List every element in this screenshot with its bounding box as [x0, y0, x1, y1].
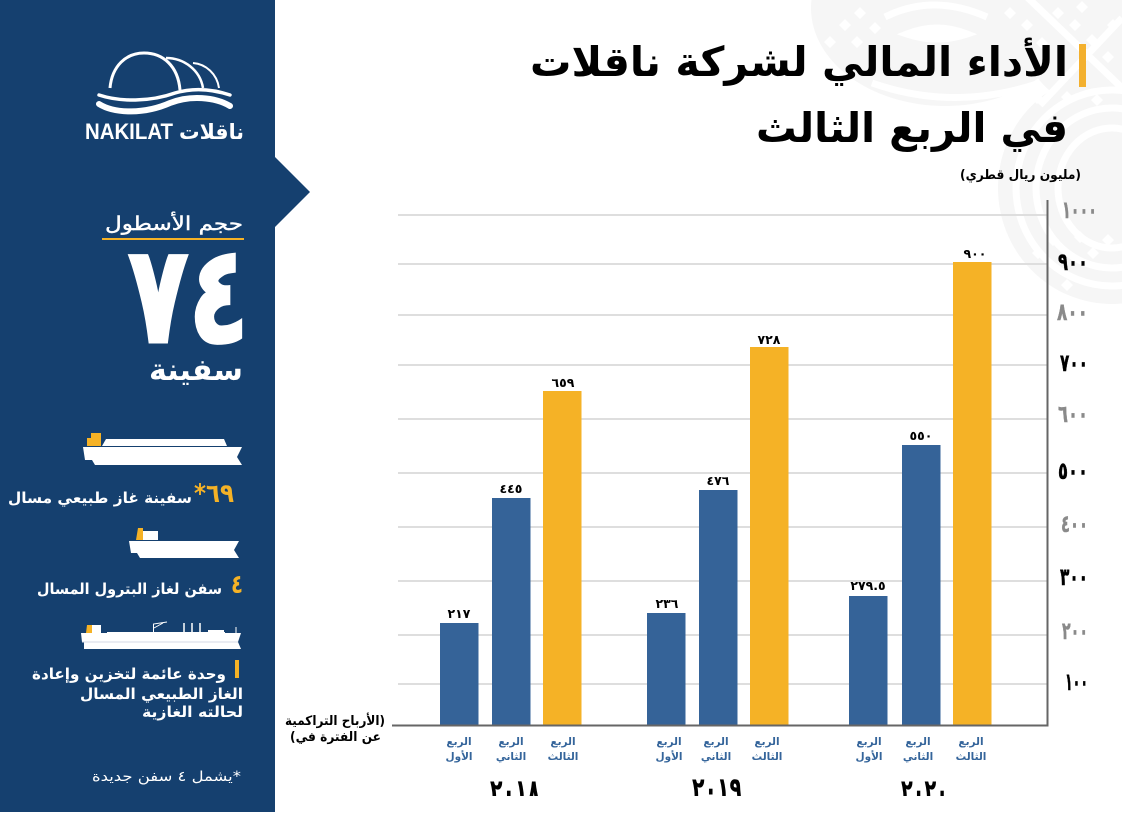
icon: FSRU — [81, 622, 241, 649]
quarter labels: الأول — [855, 750, 883, 763]
bar values: ٤٤٥ — [500, 481, 522, 496]
year labels: ٢٠١٨ — [490, 772, 540, 812]
FSRU label — [32, 665, 243, 721]
quarter labels: الثاني — [903, 751, 933, 763]
cumulative profit note — [285, 712, 385, 745]
bar values: ٦٥٩ — [552, 375, 575, 390]
logo — [85, 53, 244, 144]
bars 2020 — [849, 262, 992, 725]
FSRU count — [235, 660, 239, 678]
y axis labels: ١٠٠٠ — [1062, 196, 1097, 224]
LPG count: ٤ — [231, 570, 243, 600]
y axis labels: ٤٠٠ — [1061, 510, 1088, 538]
fleet size unit: سفينة — [149, 353, 243, 388]
quarter labels: الثالث — [752, 751, 782, 763]
title — [530, 36, 1068, 152]
cumulative profit note: عن الفترة في) — [290, 730, 381, 745]
title accent bar — [1079, 44, 1086, 87]
LNG label: سفينة غاز طبيعي مسال — [8, 489, 192, 507]
bar values: ٧٢٨ — [758, 332, 781, 347]
y axis labels: ١٠٠ — [1065, 668, 1088, 696]
LNG count: ٦٩* — [194, 479, 234, 509]
quarter labels: الربع — [958, 736, 984, 748]
bar chart — [392, 196, 1097, 812]
bar values: ٥٥٠ — [910, 428, 932, 443]
logo: NAKILAT — [85, 119, 174, 144]
quarter labels: الربع — [446, 736, 472, 748]
quarter labels: الربع — [905, 736, 931, 748]
year labels: ٢٠٢٠ — [901, 772, 948, 812]
y axis labels: ٥٠٠ — [1058, 457, 1088, 485]
unit note: (مليون ريال قطري) — [960, 168, 1081, 183]
quarter labels: الربع — [856, 736, 882, 748]
fleet size number: ٧٤ — [128, 217, 249, 375]
quarter labels — [445, 736, 986, 763]
quarter labels: الثالث — [956, 751, 986, 763]
quarter labels: الأول — [655, 750, 683, 763]
quarter labels: الثالث — [548, 751, 578, 763]
quarter labels: الربع — [754, 736, 780, 748]
y axis labels: ٦٠٠ — [1058, 400, 1088, 428]
bar values: ٢١٧ — [448, 606, 471, 621]
y axis labels: ٧٠٠ — [1060, 349, 1088, 377]
quarter labels: الربع — [550, 736, 576, 748]
quarter labels: الربع — [703, 736, 729, 748]
sidebar panel — [0, 0, 310, 812]
FSRU label: الغاز الطبيعي المسال — [80, 685, 243, 703]
title: في الربع الثالث — [756, 104, 1068, 152]
y axis labels: ٩٠٠ — [1058, 248, 1088, 276]
title: الأداء المالي لشركة ناقلات — [530, 36, 1068, 86]
icon: LPG carrier — [129, 528, 239, 558]
background geometric pattern — [811, 0, 1122, 304]
bars 2019 — [647, 347, 788, 725]
bars 2018 — [440, 391, 582, 725]
year labels — [490, 779, 944, 796]
icon: LNG carrier — [83, 433, 242, 465]
bar values — [448, 246, 986, 621]
cumulative profit note: (الأرباح التراكمية — [285, 712, 385, 729]
logo: ناقلات — [179, 120, 244, 144]
bar values: ٩٠٠ — [964, 246, 986, 261]
bar values: ٢٣٦ — [656, 596, 679, 611]
fleet heading: حجم الأسطول — [105, 212, 243, 235]
heading underline — [102, 238, 244, 240]
bar values: ٤٧٦ — [707, 473, 730, 488]
y axis labels: ٢٠٠ — [1062, 617, 1088, 645]
quarter labels: الربع — [498, 736, 524, 748]
FSRU label: لحالته الغازية — [142, 703, 243, 721]
quarter labels: الثاني — [496, 751, 526, 763]
LPG label: سفن لغاز البترول المسال — [37, 580, 222, 598]
y axis labels: ٨٠٠ — [1057, 298, 1088, 326]
axes — [392, 200, 1048, 726]
y axis labels — [1057, 196, 1097, 696]
bar values: ٢٧٩.٥ — [850, 578, 886, 593]
quarter labels: الثاني — [701, 751, 731, 763]
y axis labels: ٣٠٠ — [1060, 563, 1088, 591]
footnote: *يشمل ٤ سفن جديدة — [92, 769, 241, 785]
year labels: ٢٠١٩ — [692, 770, 742, 810]
quarter labels: الربع — [656, 736, 682, 748]
quarter labels: الأول — [445, 750, 473, 763]
FSRU label: وحدة عائمة لتخزين وإعادة — [32, 665, 226, 683]
